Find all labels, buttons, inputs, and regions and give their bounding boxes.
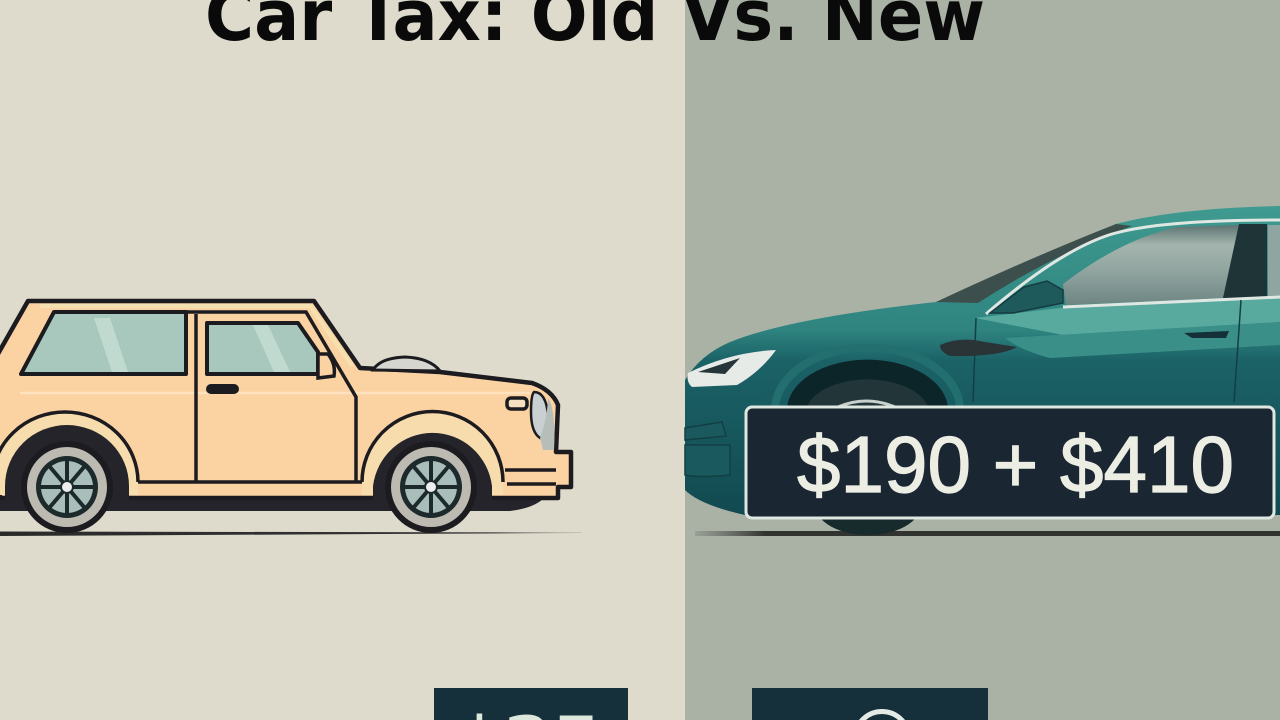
ground line: old car	[0, 532, 582, 536]
new car shoulder highlight	[975, 297, 1280, 335]
side mirror	[990, 281, 1063, 313]
grille	[531, 392, 548, 438]
new car windshield strip	[936, 224, 1132, 303]
front wheel	[385, 441, 477, 533]
callout: new car tax amount	[746, 407, 1274, 518]
front wheel arch	[787, 360, 948, 410]
new car pillar	[1223, 224, 1267, 298]
icon: new car	[685, 206, 1280, 535]
hood bump	[373, 357, 440, 371]
front wheel arch	[362, 412, 503, 511]
new car lower shoulder	[1005, 322, 1280, 358]
roof highlight	[40, 306, 352, 366]
rear window	[21, 312, 186, 374]
new car window	[1063, 225, 1239, 305]
new car tire bottom	[815, 475, 921, 535]
rear wheel arch	[0, 412, 138, 511]
bumper	[505, 470, 556, 484]
body highlight	[20, 392, 530, 394]
new car rear window	[1268, 225, 1280, 297]
door lines	[973, 300, 1241, 402]
panel: old car background	[0, 0, 685, 720]
front window	[207, 323, 318, 374]
fog light	[685, 422, 730, 476]
ground line: new car	[695, 531, 1280, 536]
side marker	[507, 398, 527, 409]
callout: new car amount	[752, 688, 988, 720]
rear wheel	[21, 441, 113, 533]
headlight	[688, 350, 776, 387]
front rim	[838, 401, 895, 407]
icon: old car	[0, 301, 571, 533]
side mirror	[318, 354, 334, 378]
window reflections	[94, 318, 290, 372]
front tire	[806, 379, 929, 410]
chrome trim	[986, 220, 1280, 314]
door frame	[138, 312, 362, 482]
callout: old car amount	[434, 688, 628, 720]
callout: new car tax amount: $190 + $410	[797, 420, 1234, 509]
side blinker	[940, 340, 1017, 356]
panel: new car background	[685, 0, 1280, 720]
front fender highlight	[775, 348, 960, 410]
old car body	[0, 301, 571, 498]
door handle	[1184, 331, 1229, 338]
old car underbody	[0, 497, 545, 511]
door handle	[206, 384, 239, 394]
new car body	[685, 206, 1280, 515]
